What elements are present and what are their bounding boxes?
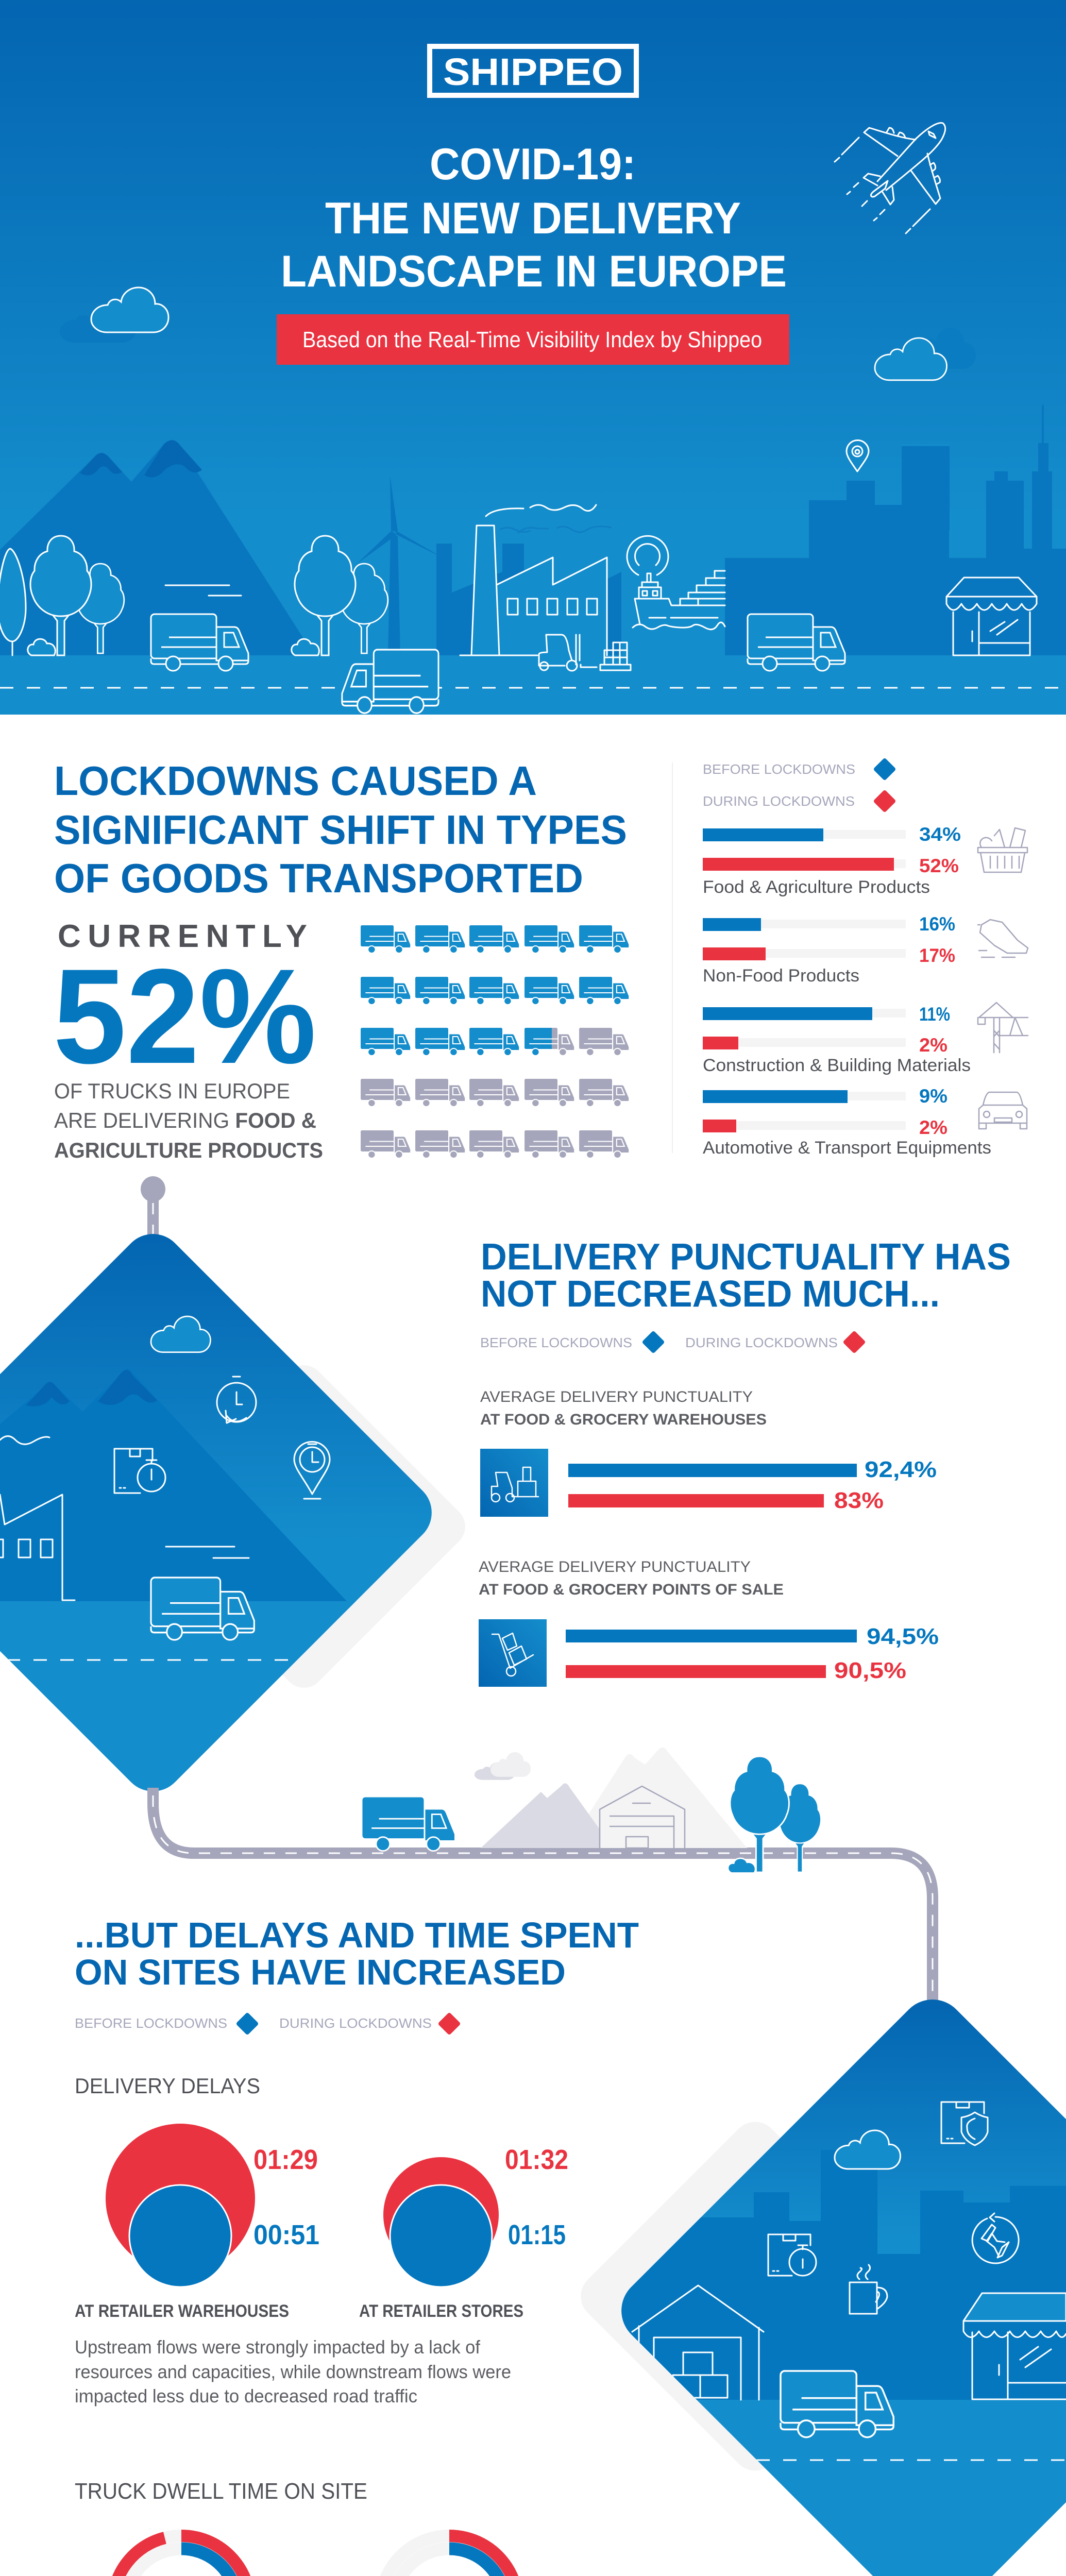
chart: points of sale punctuality: AVERAGE DELIVERY PUNCTUALITY	[479, 1558, 751, 1575]
legend: delays: DURING LOCKDOWNS	[279, 2015, 432, 2031]
icon: coffee	[850, 2265, 887, 2314]
big stat: 52%: 52%	[53, 941, 316, 1092]
icon: left cloud	[60, 287, 168, 343]
panel: right diamond scene	[567, 1984, 1066, 2576]
legend: punctuality: DURING LOCKDOWNS	[685, 1335, 838, 1350]
heading: lockdowns shift: LOCKDOWNS CAUSED A	[54, 758, 537, 804]
panel: delays	[75, 1915, 639, 2406]
icon: clock pin	[294, 1442, 330, 1499]
subtitle banner	[277, 314, 789, 365]
chart: construction: 11%	[919, 1004, 950, 1025]
road: top pin and stub	[141, 1176, 165, 1236]
trees left	[0, 536, 124, 655]
icon: cycle hourglass	[972, 2213, 1019, 2263]
text: delays explanation: Upstream flows were strongly impacted by a lack of	[75, 2336, 481, 2358]
factory	[436, 505, 631, 671]
chart: food and agriculture: Food & Agriculture Products	[703, 877, 930, 897]
legend: goods	[703, 757, 896, 813]
icon: airplane	[835, 123, 945, 233]
trees: road	[728, 1756, 821, 1873]
chart: points of sale punctuality	[479, 1558, 939, 1687]
chart: points of sale punctuality: AT FOOD & GROCERY POINTS OF SALE	[479, 1581, 784, 1598]
heading: lockdowns shift: OF GOODS TRANSPORTED	[54, 855, 583, 901]
pictogram: truck grid	[360, 925, 629, 1158]
chart: delays warehouses: 01:29	[253, 2144, 318, 2175]
title: THE NEW DELIVERY	[325, 194, 741, 243]
logo: Shippeo: SHIPPEO	[443, 50, 623, 93]
heading: punctuality: NOT DECREASED MUCH...	[481, 1274, 940, 1315]
store	[946, 578, 1037, 655]
title	[281, 140, 787, 296]
icon: shoe	[978, 920, 1028, 957]
chart: non-food: Non-Food Products	[703, 966, 859, 986]
text: trucks in europe: OF TRUCKS IN EUROPE	[54, 1079, 290, 1103]
chart: delays warehouses: 00:51	[253, 2219, 319, 2250]
diamond	[621, 1999, 1066, 2576]
icon: wind turbine	[357, 476, 445, 655]
text: delays explanation: impacted less due to decreased road traffic	[75, 2385, 417, 2406]
icon: food basket	[978, 828, 1027, 872]
heading: lockdowns shift: SIGNIFICANT SHIFT IN TYPES	[54, 807, 627, 853]
icon: stopwatch	[217, 1377, 256, 1423]
mountains	[0, 440, 314, 655]
truck: right	[748, 614, 845, 671]
chart: delays stores	[359, 2144, 568, 2321]
icon: right cloud	[875, 328, 976, 380]
text: currently: CURRENTLY	[58, 919, 307, 954]
chart: automotive: 9%	[919, 1086, 947, 1107]
icon: cloud	[151, 1316, 210, 1352]
icon: location pin	[847, 440, 869, 471]
road: middle section	[153, 1788, 933, 2007]
subheading: delivery delays: DELIVERY DELAYS	[75, 2074, 260, 2098]
panel: punctuality	[479, 1236, 1011, 1687]
legend: goods: DURING LOCKDOWNS	[703, 793, 855, 809]
heading: delays: ON SITES HAVE INCREASED	[75, 1952, 566, 1992]
chart: dwell warehouses	[75, 2536, 333, 2576]
chart: construction: 2%	[919, 1035, 947, 1056]
chart: automotive	[703, 1086, 991, 1158]
scene: road mountains and warehouse	[362, 1748, 821, 1873]
icon: crane	[978, 1003, 1028, 1053]
icon: grey cloud	[475, 1752, 531, 1780]
chart: points of sale punctuality: 90,5%	[834, 1658, 906, 1683]
diamond shadow	[134, 1357, 474, 1697]
store outline	[963, 2293, 1066, 2399]
heading: punctuality: DELIVERY PUNCTUALITY HAS	[481, 1236, 1011, 1278]
chart: points of sale punctuality: 94,5%	[867, 1624, 939, 1649]
chart: delays stores: 01:32	[505, 2144, 568, 2175]
chart: non-food: 16%	[919, 913, 955, 935]
trees middle	[292, 536, 388, 655]
heading: punctuality	[481, 1236, 1011, 1315]
panel: goods shift	[53, 757, 1028, 1162]
legend: punctuality	[480, 1330, 866, 1354]
heading: delays	[75, 1915, 639, 1992]
panel: left diamond scene	[0, 1234, 465, 1791]
chart: warehouses punctuality: 83%	[834, 1488, 884, 1513]
truck: right diamond	[781, 2371, 893, 2437]
text: trucks in europe	[54, 1079, 323, 1162]
chart: construction: Construction & Building Materials	[703, 1056, 971, 1075]
icon: car	[979, 1092, 1027, 1129]
text: trucks in europe: ARE DELIVERING FOOD &	[54, 1108, 316, 1132]
icon: parcel shield	[941, 2102, 988, 2145]
truck: road blue	[362, 1797, 455, 1851]
icon: parcel timer	[768, 2234, 816, 2276]
panel: hero header	[0, 0, 1066, 715]
truck: left	[151, 585, 248, 671]
chart: non-food	[703, 913, 955, 986]
truck: centre	[342, 650, 438, 713]
chart: warehouses punctuality: 92,4%	[865, 1457, 937, 1482]
text: delays explanation: resources and capacities, while downstream flows were	[75, 2361, 511, 2382]
chart: delays warehouses: AT RETAILER WAREHOUSES	[75, 2301, 289, 2321]
title: COVID-19:	[430, 140, 636, 189]
chart: food and agriculture: 34%	[919, 824, 961, 845]
chart: warehouses punctuality	[480, 1388, 937, 1517]
truck: diamond	[151, 1547, 254, 1640]
legend: delays	[75, 2012, 461, 2036]
chart: warehouses punctuality: AT FOOD & GROCERY WAREHOUSES	[480, 1411, 767, 1428]
subtitle banner: Based on the Real-Time Visibility Index by Shippeo	[302, 327, 762, 352]
icon: cloud	[835, 2130, 901, 2169]
chart: delays stores: AT RETAILER STORES	[359, 2301, 523, 2321]
city skyline	[725, 405, 1066, 655]
chart: construction	[703, 1004, 971, 1075]
cargo ship	[627, 536, 725, 630]
chart: warehouses punctuality: AVERAGE DELIVERY PUNCTUALITY	[480, 1388, 753, 1405]
chart: delays warehouses	[75, 2124, 319, 2321]
chart: automotive: Automotive & Transport Equipments	[703, 1138, 991, 1158]
ground and road	[0, 655, 1066, 715]
icon: parcel timer	[114, 1449, 165, 1493]
text: delays explanation	[75, 2336, 511, 2406]
panel: dwell time	[75, 2479, 608, 2576]
heading: delays: ...BUT DELAYS AND TIME SPENT	[75, 1915, 639, 1955]
legend: goods: BEFORE LOCKDOWNS	[703, 761, 855, 777]
chart: food and agriculture	[703, 824, 961, 897]
heading: lockdowns shift	[54, 758, 627, 901]
icon: warehouse	[600, 1786, 685, 1848]
diamond	[0, 1234, 432, 1791]
subheading: dwell: TRUCK DWELL TIME ON SITE	[75, 2479, 367, 2504]
chart: food and agriculture: 52%	[919, 855, 959, 876]
text: trucks in europe: AGRICULTURE PRODUCTS	[54, 1138, 323, 1162]
diamond shadow	[571, 2112, 939, 2480]
icon: warehouse outline	[632, 2285, 764, 2401]
title: LANDSCAPE IN EUROPE	[281, 247, 787, 296]
legend: delays: BEFORE LOCKDOWNS	[75, 2015, 227, 2031]
chart: dwell stores	[360, 2536, 608, 2576]
chart: delays stores: 01:15	[508, 2219, 566, 2250]
chart: non-food: 17%	[919, 945, 955, 966]
chart: automotive: 2%	[919, 1117, 947, 1138]
legend: punctuality: BEFORE LOCKDOWNS	[480, 1335, 632, 1350]
